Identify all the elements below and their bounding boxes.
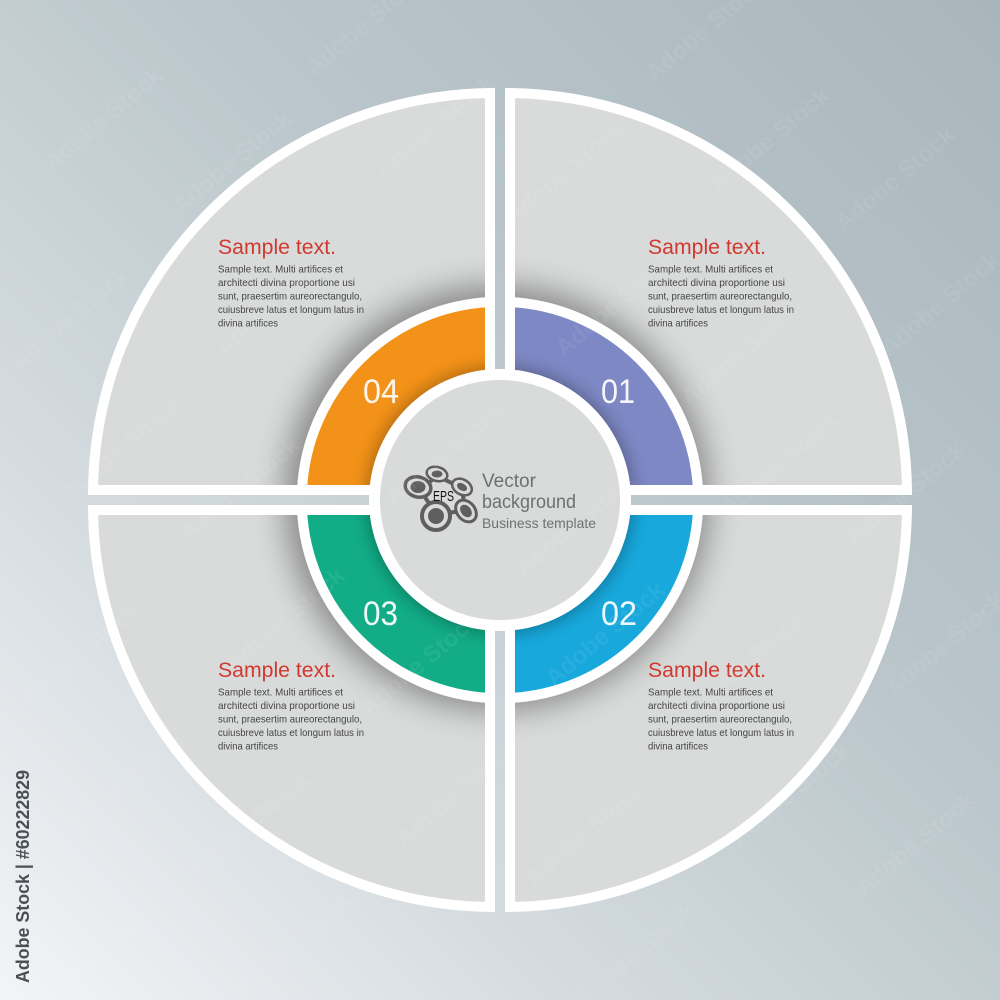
text block: bottom right: sunt, praesertim aureorectangulo, — [648, 714, 792, 726]
watermark: Adobe Stock — [5, 261, 136, 377]
text block: bottom right: divina artifices — [648, 740, 708, 752]
watermark: Adobe Stock — [210, 246, 341, 362]
watermark: Adobe Stock — [390, 736, 521, 852]
text block: bottom left: architecti divina proportione usi — [218, 700, 355, 712]
center heading: Business template — [482, 515, 596, 531]
panel: bottom right — [510, 510, 907, 907]
watermark: Adobe Stock — [380, 396, 511, 512]
center heading: background — [482, 492, 576, 513]
watermark: Adobe Stock — [500, 114, 631, 230]
text block: bottom left: Sample text. — [218, 659, 336, 682]
icon: EPS logo: EPS — [433, 488, 454, 505]
text block: top left: architecti divina proportione usi — [218, 277, 355, 289]
panel: outer quadrants — [93, 93, 907, 907]
center heading — [482, 471, 596, 531]
watermark: Adobe Stock — [38, 61, 169, 177]
center heading: Vector — [482, 471, 537, 492]
center circle — [374, 374, 626, 626]
text block: top left: Sample text. Multi artifices et — [218, 264, 343, 276]
text block: top right: divina artifices — [648, 318, 708, 330]
text block: top right: cuiusbreve latus et longum latus in — [648, 304, 794, 316]
text block: bottom left: Sample text. Multi artifices et — [218, 686, 343, 698]
text block: top left — [218, 236, 364, 330]
text block: bottom left: cuiusbreve latus et longum latus in — [218, 727, 364, 739]
center circle shadow — [366, 366, 634, 634]
number 03: 03 — [363, 595, 398, 633]
ring of numbered segments — [302, 302, 698, 698]
watermark: Adobe Stock — [540, 576, 671, 692]
text block: bottom right: Sample text. Multi artifices et — [648, 686, 773, 698]
watermark: Adobe Stock — [60, 726, 191, 842]
watermark: Adobe Stock — [510, 466, 641, 582]
watermark: Adobe Stock — [370, 69, 501, 185]
segment 02 — [510, 510, 698, 698]
text block: top right: Sample text. — [648, 236, 766, 259]
watermark: Adobe Stock — [230, 886, 361, 1000]
text block: bottom right — [648, 659, 794, 752]
text block: top left: divina artifices — [218, 318, 278, 330]
panel: top left — [93, 93, 490, 490]
watermark: Adobe Stock — [167, 104, 298, 220]
text block: top right: sunt, praesertim aureorectangulo, — [648, 290, 792, 302]
watermark: Adobe Stock — [725, 736, 856, 852]
watermark: Adobe Stock — [220, 561, 351, 677]
segment 03 — [302, 510, 490, 698]
segment 01 — [510, 302, 698, 490]
text block: top left: cuiusbreve latus et longum latus in — [218, 304, 364, 316]
watermark: Adobe Stock — [705, 81, 836, 197]
watermark: Adobe Stock — [15, 596, 146, 712]
number 04: 04 — [363, 373, 399, 411]
watermark: Adobe Stock — [550, 246, 681, 362]
watermark: Adobe Stock — [520, 776, 651, 892]
ring drop shadow — [285, 286, 709, 710]
watermark: Adobe Stock — [675, 296, 806, 412]
watermark: Adobe Stock — [840, 436, 971, 552]
text block: bottom left: sunt, praesertim aureorectangulo, — [218, 714, 362, 726]
watermark: Adobe Stock — [55, 391, 186, 507]
stock id label: Adobe Stock | #60222829 — [13, 770, 33, 983]
watermark: Adobe Stock — [715, 406, 846, 522]
panel: bottom left — [93, 510, 490, 907]
number 01: 01 — [601, 373, 635, 411]
panel: top right — [510, 93, 907, 490]
text block: bottom right: architecti divina proportione usi — [648, 700, 785, 712]
text block: bottom left — [218, 659, 364, 752]
text block: bottom right: Sample text. — [648, 659, 766, 682]
text block: top left: Sample text. — [218, 236, 336, 259]
watermark: Adobe Stock — [830, 121, 961, 237]
text block: top right: architecti divina proportione usi — [648, 277, 785, 289]
watermark: Adobe Stock — [185, 766, 316, 882]
text block: bottom left: divina artifices — [218, 740, 278, 752]
text block: top right: Sample text. Multi artifices et — [648, 264, 773, 276]
watermark: Adobe Stock — [680, 606, 811, 722]
watermark: Adobe Stock — [850, 786, 981, 902]
watermark: Adobe Stock — [175, 431, 306, 547]
segment 04 — [302, 302, 490, 490]
text block: bottom right: cuiusbreve latus et longum latus in — [648, 727, 794, 739]
icon: EPS logo — [403, 465, 481, 530]
number 02: 02 — [601, 595, 637, 633]
text block: top left: sunt, praesertim aureorectangulo, — [218, 290, 362, 302]
text block: top right — [648, 236, 794, 330]
watermark: Adobe Stock — [355, 606, 486, 722]
